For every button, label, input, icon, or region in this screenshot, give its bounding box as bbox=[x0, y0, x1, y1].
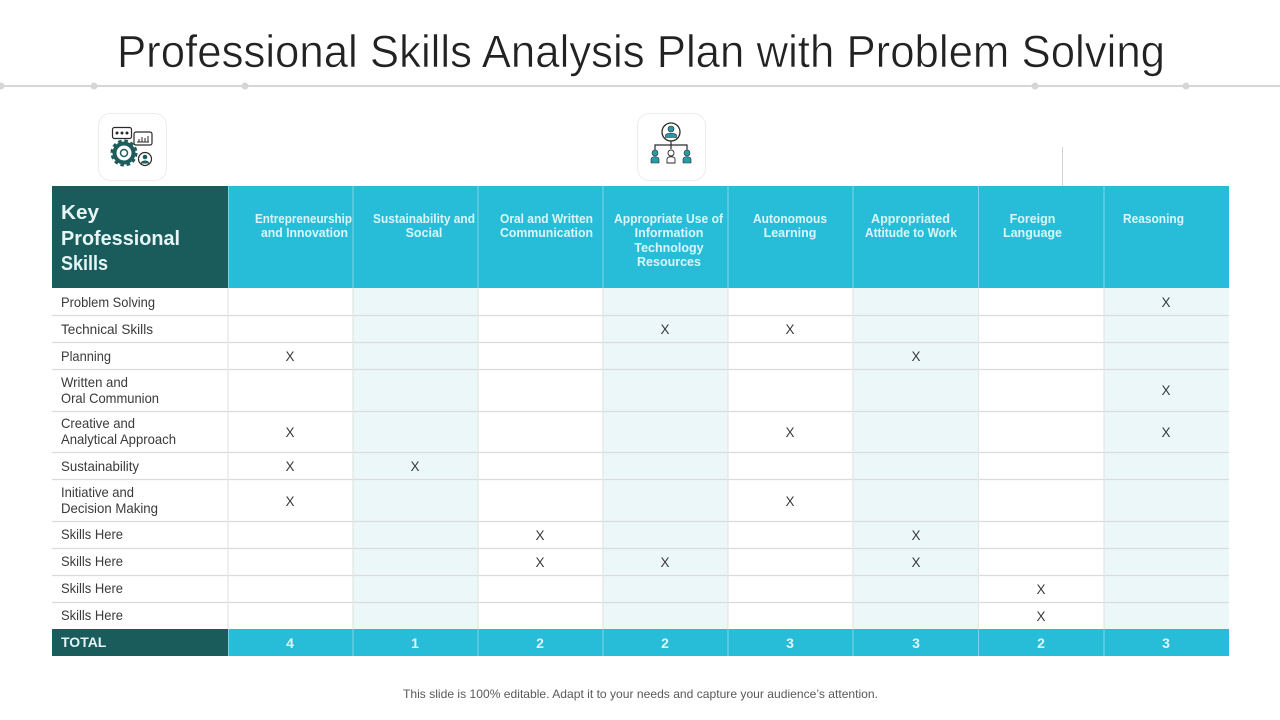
row labels bbox=[61, 294, 176, 623]
header: appropriate use of information technology resources: Resources bbox=[637, 255, 701, 269]
header: autonomous learning: Learning bbox=[764, 226, 816, 240]
thin vertical marker line bbox=[1062, 147, 1063, 186]
header: appropriated attitude to work: Appropriated bbox=[871, 212, 950, 226]
x marks: X bbox=[911, 349, 921, 364]
header: reasoning: Reasoning bbox=[1123, 212, 1184, 226]
total row: 2 bbox=[661, 635, 669, 651]
row labels: Planning bbox=[61, 348, 111, 364]
header: autonomous learning bbox=[753, 212, 827, 240]
row labels: Skills Here bbox=[61, 607, 123, 623]
total row: TOTAL bbox=[61, 634, 107, 650]
row labels: Skills Here bbox=[61, 526, 123, 542]
x marks: X bbox=[285, 425, 295, 440]
header: key professional skills bbox=[52, 186, 228, 288]
x marks: X bbox=[1161, 383, 1171, 398]
header: foreign language bbox=[1003, 212, 1062, 240]
header: appropriate use of information technology resources: Technology bbox=[634, 241, 704, 255]
x marks: X bbox=[911, 555, 921, 570]
x marks: X bbox=[285, 349, 295, 364]
x marks: X bbox=[410, 459, 420, 474]
total row bbox=[52, 629, 1229, 656]
row labels: Skills Here bbox=[61, 553, 123, 569]
x marks: X bbox=[535, 555, 545, 570]
header: oral and written communication: Communication bbox=[500, 226, 593, 240]
x marks: X bbox=[785, 494, 795, 509]
total row: 3 bbox=[912, 635, 920, 651]
header: entrepreneurship and innovation: Entrepreneurship bbox=[255, 212, 352, 226]
x marks: X bbox=[285, 459, 295, 474]
header: foreign language: Language bbox=[1003, 226, 1062, 240]
header: oral and written communication bbox=[500, 212, 593, 240]
footer note: This slide is 100% editable. Adapt it to your needs and capture your audience’s attention. bbox=[403, 687, 878, 701]
total row: 3 bbox=[1162, 635, 1170, 651]
header: key professional skills: Key bbox=[61, 201, 100, 224]
header: key professional skills: Skills bbox=[61, 252, 108, 275]
x marks: X bbox=[785, 322, 795, 337]
header: sustainability and social: Sustainability and bbox=[373, 212, 475, 226]
icon: gear with chat bubbles and person bbox=[98, 114, 166, 180]
header: entrepreneurship and innovation: and Innovation bbox=[261, 226, 348, 240]
x marks: X bbox=[1161, 425, 1171, 440]
row labels: Skills Here bbox=[61, 580, 123, 596]
x marks: X bbox=[535, 528, 545, 543]
x marks: X bbox=[785, 425, 795, 440]
header: oral and written communication: Oral and Written bbox=[500, 212, 593, 226]
header: foreign language: Foreign bbox=[1010, 212, 1055, 226]
x marks: X bbox=[911, 528, 921, 543]
header band bbox=[228, 186, 1229, 288]
row labels: Creative and bbox=[61, 415, 135, 431]
x marks: X bbox=[1161, 295, 1171, 310]
header: entrepreneurship and innovation bbox=[255, 212, 352, 240]
x marks: X bbox=[660, 322, 670, 337]
x marks: X bbox=[1036, 609, 1046, 624]
skills matrix table bbox=[52, 186, 1229, 656]
total row: 4 bbox=[286, 635, 294, 651]
timeline rule with dots bbox=[0, 82, 1280, 90]
total row: 1 bbox=[411, 635, 419, 651]
header row bbox=[52, 186, 1229, 288]
icon: organisation hierarchy bbox=[638, 114, 706, 180]
header: sustainability and social: Social bbox=[406, 226, 442, 240]
header: appropriated attitude to work: Attitude to Work bbox=[865, 226, 957, 240]
header column separators bbox=[228, 186, 1104, 288]
header: appropriate use of information technology resources bbox=[614, 212, 724, 269]
header: appropriated attitude to work bbox=[865, 212, 957, 240]
header: appropriate use of information technology resources: Information bbox=[635, 226, 703, 240]
header: autonomous learning: Autonomous bbox=[753, 212, 827, 226]
header: sustainability and social bbox=[373, 212, 475, 240]
total row: 2 bbox=[1037, 635, 1045, 651]
x marks bbox=[285, 295, 1171, 624]
row labels: Analytical Approach bbox=[61, 431, 176, 447]
header: key professional skills: Professional bbox=[61, 227, 180, 250]
x marks: X bbox=[285, 494, 295, 509]
title: Professional Skills Analysis Plan with Problem Solving bbox=[117, 26, 1165, 77]
row labels: Oral Communion bbox=[61, 390, 159, 406]
total row: 2 bbox=[536, 635, 544, 651]
x marks: X bbox=[660, 555, 670, 570]
total row: 3 bbox=[786, 635, 794, 651]
row labels: Initiative and bbox=[61, 484, 134, 500]
table body shading and grid bbox=[52, 288, 1229, 629]
x marks: X bbox=[1036, 582, 1046, 597]
header: appropriate use of information technology resources: Appropriate Use of bbox=[614, 212, 724, 226]
row labels: Sustainability bbox=[61, 458, 139, 474]
row labels: Decision Making bbox=[61, 500, 158, 516]
row labels: Problem Solving bbox=[61, 294, 155, 310]
row labels: Written and bbox=[61, 374, 128, 390]
row labels: Technical Skills bbox=[61, 321, 153, 337]
